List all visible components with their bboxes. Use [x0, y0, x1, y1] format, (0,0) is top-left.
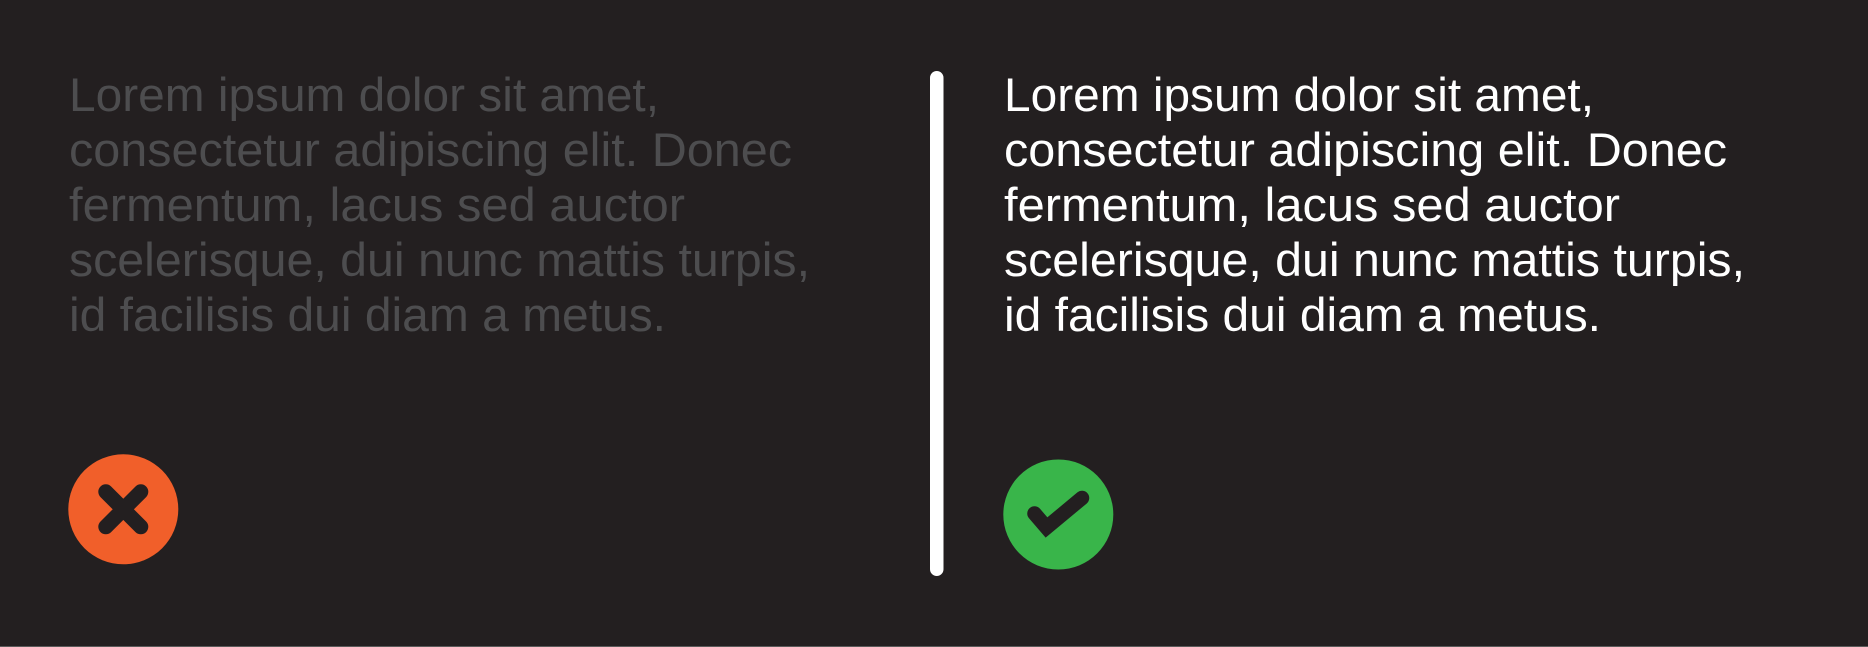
text block: high contrast example [1004, 68, 1745, 341]
text block: low contrast example: id facilisis dui diam a metus. [69, 288, 666, 341]
text block: low contrast example [69, 68, 810, 341]
text block: low contrast example: Lorem ipsum dolor sit amet, [69, 68, 659, 121]
text block: high contrast example: consectetur adipiscing elit. Donec [1004, 123, 1727, 176]
text block: low contrast example: scelerisque, dui nunc mattis turpis, [69, 233, 810, 286]
text block: low contrast example: fermentum, lacus sed auctor [69, 178, 685, 231]
icon: orange cross [68, 454, 178, 564]
icon: green check [1003, 460, 1113, 570]
text block: low contrast example: consectetur adipiscing elit. Donec [69, 123, 792, 176]
text block: high contrast example: fermentum, lacus sed auctor [1004, 178, 1620, 231]
divider bar [930, 71, 944, 576]
text block: high contrast example: Lorem ipsum dolor sit amet, [1004, 68, 1594, 121]
text block: high contrast example: id facilisis dui diam a metus. [1004, 288, 1601, 341]
text block: high contrast example: scelerisque, dui nunc mattis turpis, [1004, 233, 1745, 286]
